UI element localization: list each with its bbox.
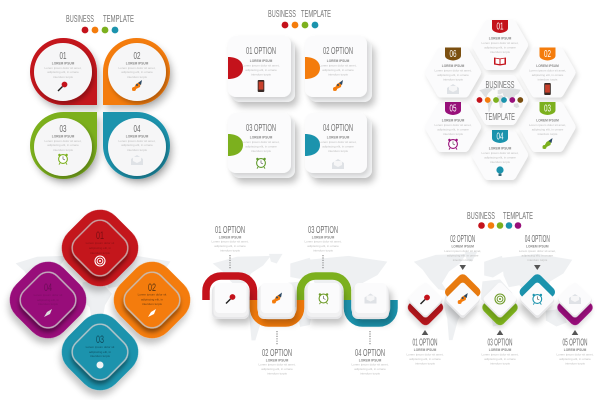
world map background xyxy=(414,252,572,340)
hexagon 03: 03 xyxy=(544,104,551,114)
label 01: LOREM IPSUM xyxy=(414,348,437,352)
item 01: LOREM IPSUM xyxy=(52,62,75,66)
label 01: adipiscing elit, in ornare xyxy=(214,244,246,248)
item 04: adipiscing elit, in ornare xyxy=(121,143,153,147)
label 01: Lorem ipsum dolor sit amet, xyxy=(406,352,444,356)
label 03: 03 OPTION xyxy=(308,224,338,236)
hexagon 01: adipiscing elit, in ornare xyxy=(484,46,516,50)
item 01: interdum turpis xyxy=(53,75,73,79)
item 04: 04 xyxy=(134,124,141,135)
card 03: adipiscing elit, in ornare xyxy=(245,144,277,148)
diamond 02: 02 xyxy=(148,282,156,294)
step 02 xyxy=(443,272,482,319)
item 04: Lorem ipsum dolor sit amet, xyxy=(118,139,156,143)
hexagon 05: interdum turpis xyxy=(443,132,463,136)
hexagon 03: interdum turpis xyxy=(538,132,558,136)
hexagon 02: interdum turpis xyxy=(538,78,558,82)
step card 01 xyxy=(212,283,249,319)
card 03: Lorem ipsum dolor sit amet, xyxy=(242,140,280,144)
label 02: 02 OPTION xyxy=(262,347,292,359)
title: BUSINESS xyxy=(268,9,296,20)
card 01: 01 OPTION xyxy=(246,45,276,57)
hexagon 04: LOREM IPSUM xyxy=(489,146,512,150)
label 03: 03 OPTION xyxy=(488,338,512,348)
colour dots xyxy=(478,222,521,229)
label 04: Lorem ipsum dolor sit amet, xyxy=(351,362,389,366)
step card 03 xyxy=(305,283,342,319)
item 02: adipiscing elit, in ornare xyxy=(121,70,153,74)
label 03 xyxy=(304,224,342,269)
card 01: interdum turpis xyxy=(251,72,271,76)
label 01: interdum turpis xyxy=(415,362,435,366)
card 02: 02 OPTION xyxy=(323,45,353,57)
step 03 xyxy=(480,281,520,327)
label 02: interdum turpis xyxy=(267,372,287,376)
item 03: interdum turpis xyxy=(53,148,73,152)
step 04 xyxy=(518,272,557,319)
diamond 01: Lorem ipsum dolor sit xyxy=(86,241,114,245)
panel: square cards template xyxy=(228,9,372,178)
label 03: adipiscing elit, in ornare xyxy=(484,357,516,361)
hexagon 05: adipiscing elit, in ornare xyxy=(437,128,469,132)
card 04 xyxy=(305,113,372,178)
label 04: adipiscing elit, in ornare xyxy=(522,254,553,258)
hexagon 02: Lorem ipsum dolor sit amet, xyxy=(529,68,566,72)
label 03: LOREM IPSUM xyxy=(312,236,335,240)
label 05 xyxy=(556,330,594,366)
card 02: Lorem ipsum dolor sit amet, xyxy=(319,64,357,68)
hexagon 05: LOREM IPSUM xyxy=(442,118,465,122)
item 04: LOREM IPSUM xyxy=(126,134,149,138)
item 02 xyxy=(103,38,170,105)
card 02 xyxy=(305,36,372,102)
title: BUSINESS xyxy=(66,14,94,25)
card 04: LOREM IPSUM xyxy=(327,136,350,140)
label 01 xyxy=(211,224,249,269)
card 03: 03 OPTION xyxy=(246,122,276,134)
label 01: interdum turpis xyxy=(220,248,240,252)
step card 02 xyxy=(258,283,295,319)
diamond 02: interdum turpis xyxy=(142,302,162,306)
diamond 04: 04 xyxy=(44,282,52,294)
diamond 02: Lorem ipsum dolor sit xyxy=(138,292,166,296)
label 01: 01 OPTION xyxy=(412,338,438,348)
item 03: LOREM IPSUM xyxy=(52,134,75,138)
diamond 01 xyxy=(53,201,147,295)
card 04: interdum turpis xyxy=(328,149,348,153)
card 01 xyxy=(228,36,295,102)
diamond 03: 03 xyxy=(96,334,104,346)
hexagon 03: Lorem ipsum dolor sit amet, xyxy=(529,123,566,127)
card 03: interdum turpis xyxy=(251,149,271,153)
item 02: Lorem ipsum dolor sit amet, xyxy=(118,66,156,70)
label 02 xyxy=(444,234,481,270)
label 01: adipiscing elit, in ornare xyxy=(409,357,441,361)
ribbon xyxy=(206,276,394,323)
hexagon 02: adipiscing elit, in ornare xyxy=(532,73,564,77)
centre hexagon with title: BUSINESS xyxy=(486,80,515,91)
hexagon 04: adipiscing elit, in ornare xyxy=(484,156,516,160)
label 02 xyxy=(258,331,296,376)
label 02: 02 OPTION xyxy=(450,234,475,245)
card 01: adipiscing elit, in ornare xyxy=(245,68,277,72)
card 03 xyxy=(228,113,295,178)
label 04: Lorem ipsum dolor sit amet, xyxy=(519,249,556,253)
label 01 xyxy=(406,330,444,366)
panel: diamond chevrons template xyxy=(406,211,595,366)
title: TEMPLATE xyxy=(503,211,533,222)
label 03: interdum turpis xyxy=(490,362,510,366)
card 03: LOREM IPSUM xyxy=(250,136,273,140)
hexagon 01 xyxy=(477,20,523,66)
label 02: LOREM IPSUM xyxy=(266,358,289,362)
hexagon 04: interdum turpis xyxy=(490,160,510,164)
hexagon 06: LOREM IPSUM xyxy=(442,64,465,68)
diamond 04: Lorem ipsum dolor sit xyxy=(34,293,62,297)
world map background xyxy=(213,254,387,340)
hexagon 06: 06 xyxy=(450,49,457,60)
item 03: 03 xyxy=(60,124,67,135)
label 02: adipiscing elit, in ornare xyxy=(447,254,479,258)
diamond 02 xyxy=(105,253,199,347)
card 01: Lorem ipsum dolor sit amet, xyxy=(242,64,280,68)
title: TEMPLATE xyxy=(301,9,331,20)
card 02: interdum turpis xyxy=(328,72,348,76)
step 01 xyxy=(406,281,445,327)
world map background xyxy=(16,254,170,339)
hexagon 02: 02 xyxy=(544,49,551,60)
hexagon 01: Lorem ipsum dolor sit amet, xyxy=(481,41,519,45)
diamond 03: Lorem ipsum dolor sit xyxy=(86,345,114,349)
step 05 xyxy=(555,281,595,327)
card 04: Lorem ipsum dolor sit amet, xyxy=(319,140,357,144)
step card 04 xyxy=(352,283,389,319)
diamond 04 xyxy=(1,253,95,347)
label 04: 04 OPTION xyxy=(525,234,550,245)
panel: hexagon template xyxy=(430,20,570,176)
label 03: Lorem ipsum dolor sit amet, xyxy=(481,352,519,356)
centre hexagon with title xyxy=(477,80,523,123)
item 01: adipiscing elit, in ornare xyxy=(47,70,79,74)
label 01: LOREM IPSUM xyxy=(219,236,242,240)
diamond 04: interdum turpis xyxy=(38,302,58,306)
item 04 xyxy=(103,112,170,179)
label 03 xyxy=(481,330,519,366)
hexagon 04 xyxy=(477,130,523,176)
item 02: LOREM IPSUM xyxy=(126,62,149,66)
panel: ribbon timeline template xyxy=(206,224,394,376)
item 03 xyxy=(30,112,97,179)
hexagon 01: interdum turpis xyxy=(490,50,510,54)
hexagon 05 xyxy=(430,102,476,150)
item 01: 01 xyxy=(60,51,67,62)
item 03: Lorem ipsum dolor sit amet, xyxy=(44,139,82,143)
hexagon 03 xyxy=(524,102,570,149)
diamond 03: adipiscing elit, in xyxy=(89,350,111,354)
hexagon 03: adipiscing elit, in ornare xyxy=(532,128,564,132)
label 05: adipiscing elit, in ornare xyxy=(559,357,591,361)
colour dots xyxy=(282,22,318,28)
label 02: adipiscing elit, in ornare xyxy=(261,367,293,371)
hexagon 05: 05 xyxy=(450,104,457,114)
hexagon 06 xyxy=(430,48,476,94)
title: BUSINESS xyxy=(467,211,495,222)
diamond 03 xyxy=(53,305,147,399)
diamond 04: adipiscing elit, in xyxy=(37,298,59,302)
diamond 01: interdum turpis xyxy=(90,251,110,255)
centre hexagon with title: TEMPLATE xyxy=(485,112,515,123)
label 02: LOREM IPSUM xyxy=(451,244,474,248)
panel: circular teardrop template xyxy=(30,14,170,179)
label 02: Lorem ipsum dolor sit amet, xyxy=(444,249,481,253)
label 02: Lorem ipsum dolor sit amet, xyxy=(258,362,296,366)
card 02: adipiscing elit, in ornare xyxy=(322,68,354,72)
hexagon 05: Lorem ipsum dolor sit amet, xyxy=(434,123,472,127)
label 04: 04 OPTION xyxy=(355,347,385,359)
card 04: adipiscing elit, in ornare xyxy=(322,144,354,148)
diamond 01: adipiscing elit, in xyxy=(89,246,111,250)
label 04: adipiscing elit, in ornare xyxy=(354,367,386,371)
title: TEMPLATE xyxy=(103,14,134,25)
hexagon 06: Lorem ipsum dolor sit amet, xyxy=(434,68,472,72)
label 01: Lorem ipsum dolor sit amet, xyxy=(211,240,249,244)
label 04 xyxy=(351,331,389,376)
label 04 xyxy=(519,234,556,270)
hexagon 04: 04 xyxy=(496,132,504,142)
label 04: interdum turpis xyxy=(360,372,380,376)
diamond 03: interdum turpis xyxy=(90,354,110,358)
item 01: Lorem ipsum dolor sit amet, xyxy=(44,66,82,70)
label 05: LOREM IPSUM xyxy=(564,348,587,352)
item 02: interdum turpis xyxy=(127,75,147,79)
diamond 02: adipiscing elit, in xyxy=(141,298,163,302)
hexagon 03: LOREM IPSUM xyxy=(536,118,559,122)
diamond 01: 01 xyxy=(96,230,104,242)
label 03: interdum turpis xyxy=(313,248,333,252)
item 03: adipiscing elit, in ornare xyxy=(47,143,79,147)
panel: rounded diamonds template xyxy=(1,201,199,399)
hexagon 06: interdum turpis xyxy=(443,78,463,82)
card 01: LOREM IPSUM xyxy=(250,59,273,63)
label 03: LOREM IPSUM xyxy=(489,348,512,352)
hexagon 02 xyxy=(524,48,570,95)
label 04: LOREM IPSUM xyxy=(526,244,549,248)
card 02: LOREM IPSUM xyxy=(327,59,350,63)
hexagon 01: LOREM IPSUM xyxy=(489,36,512,40)
hexagon 06: adipiscing elit, in ornare xyxy=(437,73,469,77)
label 04: interdum turpis xyxy=(527,258,548,262)
label 01: 01 OPTION xyxy=(215,224,245,236)
label 04: LOREM IPSUM xyxy=(359,358,382,362)
label 02: interdum turpis xyxy=(453,258,473,262)
hexagon 02: LOREM IPSUM xyxy=(536,64,559,68)
item 01 xyxy=(30,38,97,105)
item 02: 02 xyxy=(134,51,141,62)
label 05: interdum turpis xyxy=(565,362,585,366)
colour dots xyxy=(82,27,118,33)
card 04: 04 OPTION xyxy=(323,122,353,134)
label 03: adipiscing elit, in ornare xyxy=(307,244,339,248)
item 04: interdum turpis xyxy=(127,148,147,152)
label 03: Lorem ipsum dolor sit amet, xyxy=(304,240,342,244)
hexagon 01: 01 xyxy=(496,22,504,32)
hexagon 04: Lorem ipsum dolor sit amet, xyxy=(481,151,519,155)
label 05: Lorem ipsum dolor sit amet, xyxy=(556,352,594,356)
